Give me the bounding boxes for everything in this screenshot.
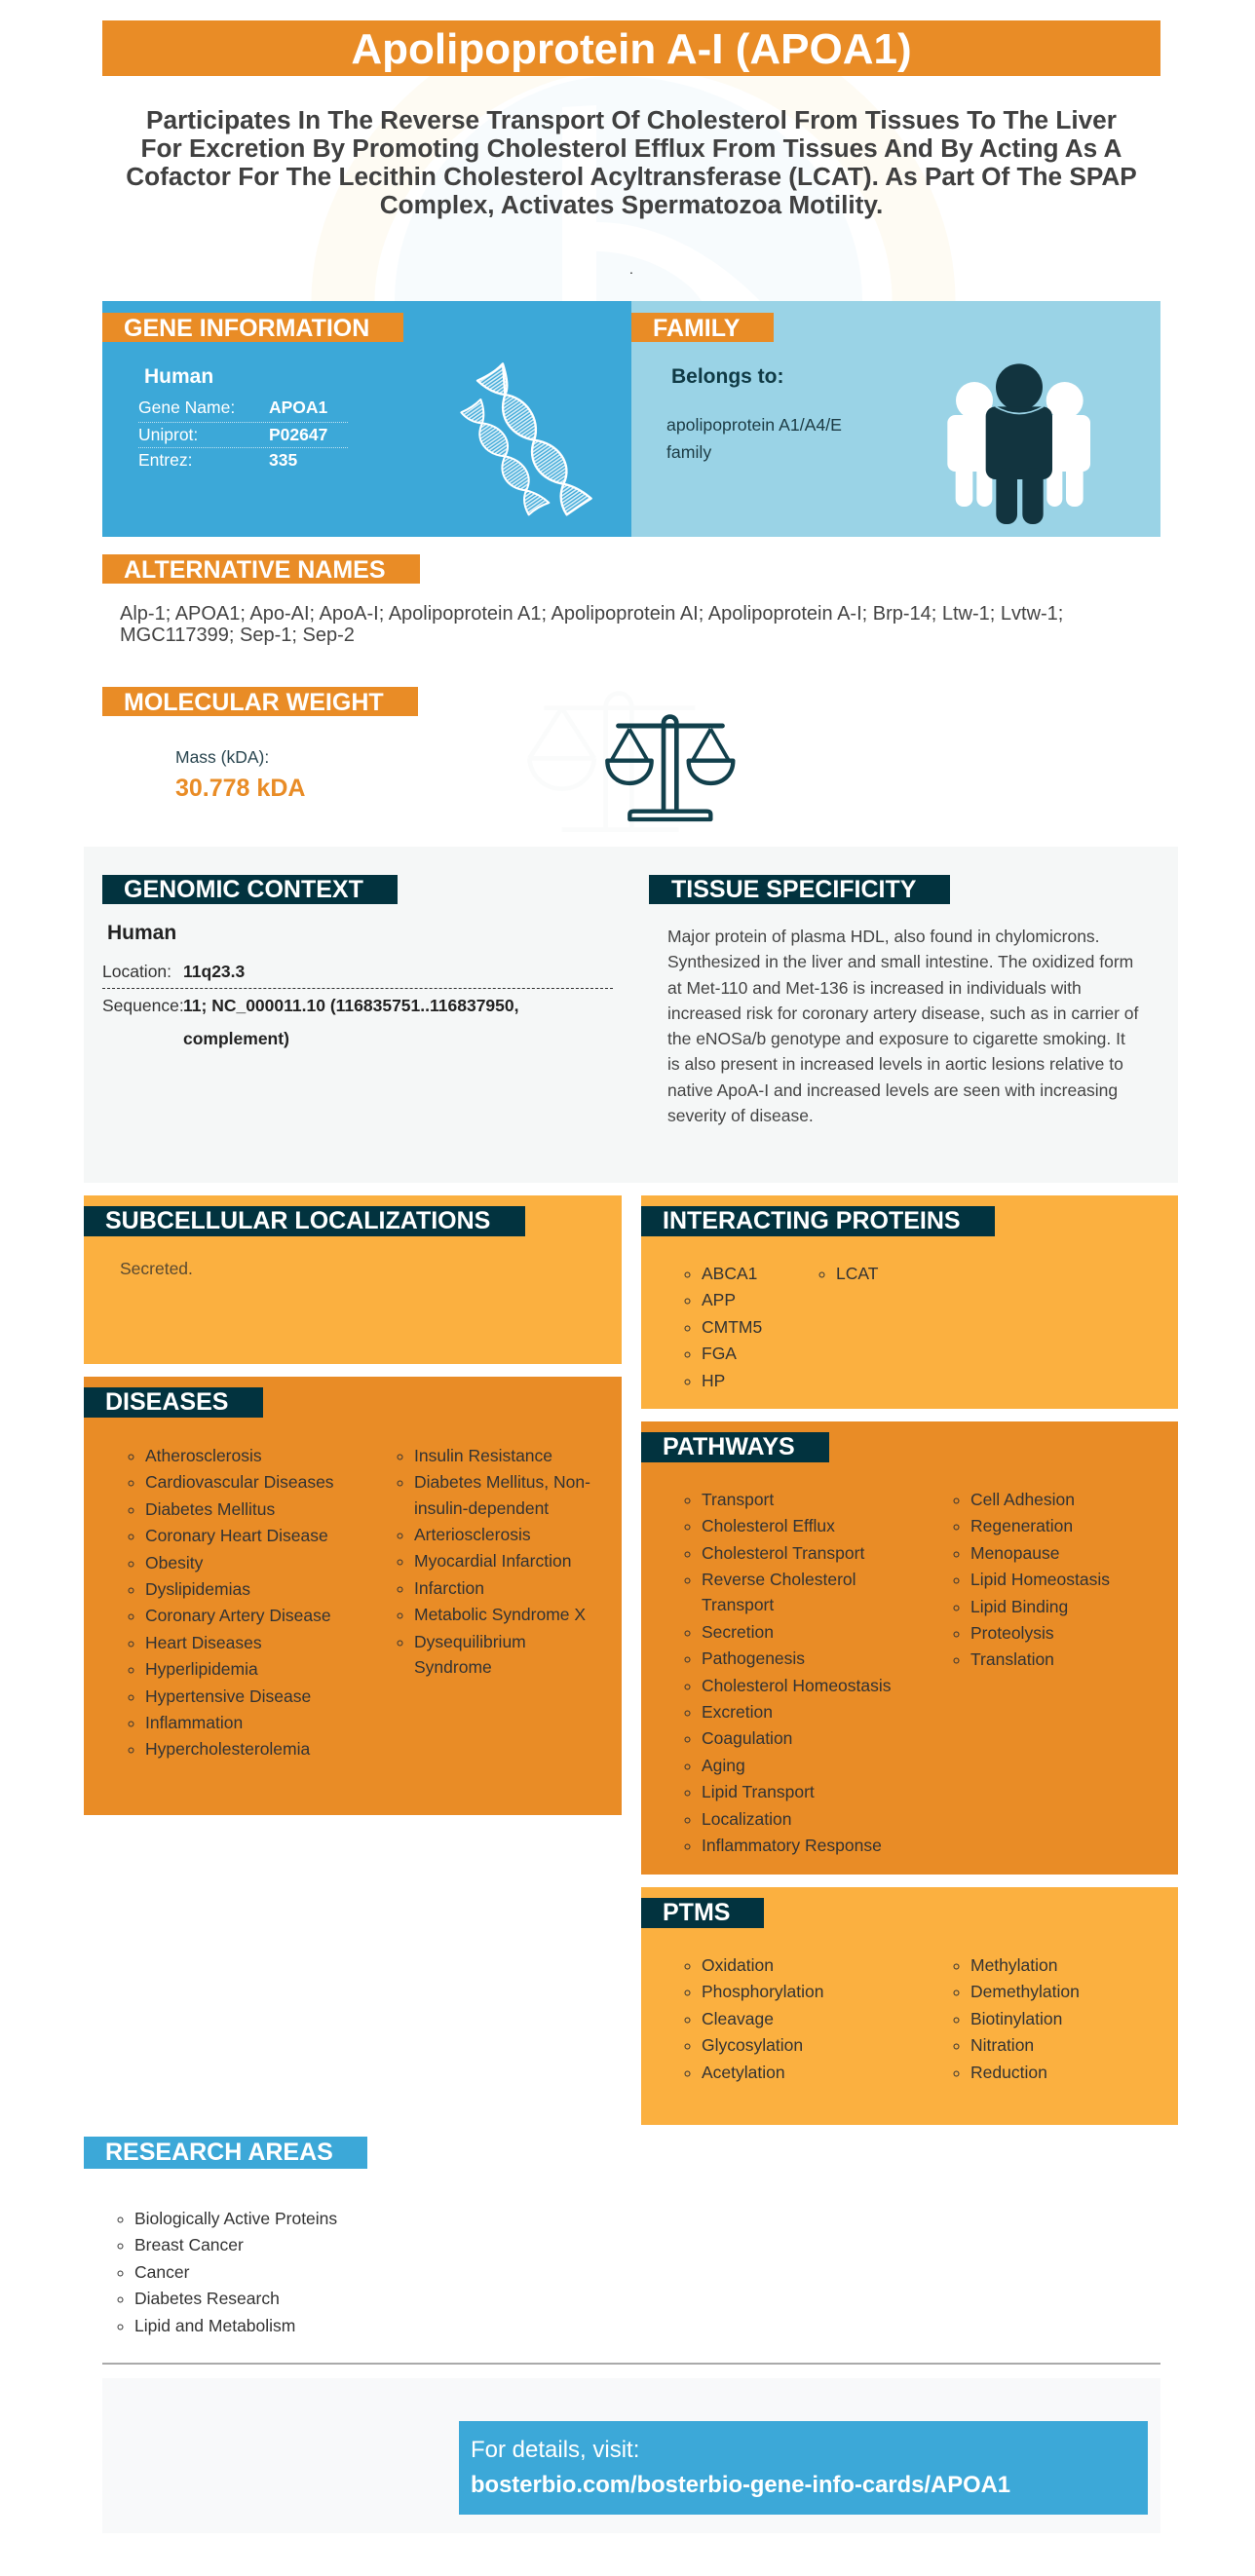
icon: balance scale	[605, 714, 735, 822]
list: diseases column 1: Inflammation	[145, 1713, 243, 1732]
description text: Participates In The Reverse Transport Of Cholesterol From Tissues To The Liver	[146, 105, 1117, 134]
dot mark: .	[629, 261, 633, 277]
list: pathways column 1: Cholesterol Efflux	[702, 1516, 835, 1535]
list: pathways column 2: Translation	[970, 1649, 1054, 1669]
list: pathways column 2	[953, 1490, 1110, 1669]
alternative names text: MGC117399; Sep-1; Sep-2	[120, 625, 355, 646]
list: ptms column 1: Acetylation	[702, 2063, 785, 2082]
list: diseases column 2: Arteriosclerosis	[414, 1525, 531, 1544]
location row: 11q23.3	[183, 962, 245, 981]
list: pathways column 2: Lipid Homeostasis	[970, 1570, 1110, 1589]
list: interacting proteins column 1: CMTM5	[702, 1317, 762, 1337]
list: diseases column 1: Hypercholesterolemia	[145, 1739, 310, 1759]
list: pathways column 1: Excretion	[702, 1702, 773, 1722]
icon: people group	[947, 363, 1090, 524]
panel: pathways	[641, 1421, 1178, 1875]
list: diseases column 1: Coronary Heart Disease	[145, 1526, 328, 1545]
list: diseases column 2: Diabetes Mellitus, Non-	[414, 1472, 590, 1492]
list: pathways column 2: Menopause	[970, 1543, 1059, 1563]
list: pathways column 1: Inflammatory Response	[702, 1836, 882, 1855]
tissue specificity text: Major protein of plasma HDL, also found in chylomicrons.	[667, 927, 1100, 946]
heading: pathways: PATHWAYS	[663, 1433, 795, 1460]
location row: Location:	[102, 962, 171, 981]
panel: diseases	[84, 1377, 622, 1815]
list: ptms column 1: Phosphorylation	[702, 1982, 824, 2001]
icon: faint scale watermark	[507, 672, 760, 838]
list: ptms column 1: Glycosylation	[702, 2035, 803, 2055]
list: pathways column 2: Cell Adhesion	[970, 1490, 1075, 1509]
list: pathways column 1: Aging	[702, 1756, 745, 1775]
list: pathways column 1: Localization	[702, 1809, 791, 1829]
heading: ptms: PTMS	[663, 1899, 730, 1926]
tissue specificity text: at Met-110 and Met-136 is increased in individuals with	[667, 978, 1082, 998]
list: diseases column 2: Insulin Resistance	[414, 1446, 552, 1465]
tissue specificity text: the eNOSa/b genotype and exposure to cigarette smoking. It	[667, 1029, 1125, 1048]
tissue specificity text: increased risk for coronary artery disease, such as in carrier of	[667, 1004, 1138, 1023]
panel: family	[631, 301, 1160, 537]
list: diseases column 1: Heart Diseases	[145, 1633, 262, 1652]
list: research areas: Biologically Active Proteins	[134, 2209, 337, 2228]
list: ptms column 2: Methylation	[970, 1955, 1058, 1975]
list: research areas: Breast Cancer	[134, 2235, 244, 2254]
panel: subcellular localizations	[84, 1195, 622, 1364]
tissue specificity text: severity of disease.	[667, 1106, 814, 1125]
list: interacting proteins column 1	[684, 1264, 762, 1390]
heading: research areas: RESEARCH AREAS	[105, 2139, 333, 2166]
heading: research areas	[84, 2137, 367, 2169]
list: research areas: Diabetes Research	[134, 2289, 280, 2308]
list: diseases column 1: Cardiovascular Diseases	[145, 1472, 334, 1492]
family name	[666, 415, 842, 462]
sequence row	[102, 996, 518, 1048]
list: ptms column 2: Nitration	[970, 2035, 1034, 2055]
list: interacting proteins column 1: FGA	[702, 1344, 737, 1363]
panel: gene information	[102, 301, 631, 537]
list: interacting proteins column 1: HP	[702, 1371, 725, 1390]
uniprot row: Uniprot:	[138, 425, 198, 444]
panel: genomic context and tissue specificity: 11; NC_000011.10 (116835751..116837950,	[183, 996, 518, 1015]
list: pathways column 1: Reverse Cholesterol	[702, 1570, 856, 1589]
list: pathways column 1: Secretion	[702, 1622, 774, 1642]
heading: interacting proteins: INTERACTING PROTEINS	[663, 1207, 961, 1234]
list: pathways column 1: Pathogenesis	[702, 1648, 805, 1668]
divider rule	[102, 2363, 1160, 2365]
uniprot row	[138, 424, 348, 448]
heading: gene information: GENE INFORMATION	[124, 315, 369, 342]
list: diseases column 2: Metabolic Syndrome X	[414, 1605, 586, 1624]
localization text: Secreted.	[120, 1259, 193, 1278]
alternative names text	[120, 603, 1063, 646]
heading: alternative names: ALTERNATIVE NAMES	[124, 556, 386, 584]
family name: family	[666, 442, 711, 462]
mass label: Mass (kDA):	[175, 747, 269, 767]
uniprot row: P02647	[269, 425, 327, 444]
tissue specificity text: Synthesized in the liver and small intestine. The oxidized form	[667, 952, 1133, 971]
heading: pathways	[641, 1432, 829, 1462]
list: ptms column 2: Reduction	[970, 2063, 1047, 2082]
list: diseases column 1: Atherosclerosis	[145, 1446, 262, 1465]
list: diseases column 1: Obesity	[145, 1553, 203, 1572]
list: pathways column 2: Lipid Binding	[970, 1597, 1068, 1616]
list: ptms column 2: Demethylation	[970, 1982, 1080, 2001]
title banner	[102, 20, 1160, 76]
entrez row: Entrez:	[138, 450, 192, 470]
list: diseases column 1: Dyslipidemias	[145, 1579, 250, 1599]
species label: Human	[144, 365, 213, 388]
entrez row: 335	[269, 450, 297, 470]
list: pathways column 1: Transport	[702, 1595, 774, 1614]
list: research areas	[117, 2209, 337, 2335]
list: pathways column 2: Regeneration	[970, 1516, 1073, 1535]
list: interacting proteins column 2: LCAT	[836, 1264, 878, 1283]
description text: Complex, Activates Spermatozoa Motility.	[380, 190, 883, 219]
heading: subcellular localizations: SUBCELLULAR LOCALIZATIONS	[105, 1207, 490, 1234]
list: diseases column 1: Diabetes Mellitus	[145, 1499, 275, 1519]
gene name row: APOA1	[269, 398, 327, 417]
sequence row: Sequence:	[102, 996, 184, 1015]
panel: interacting proteins	[641, 1195, 1178, 1409]
heading: diseases	[84, 1387, 263, 1418]
list: research areas: Cancer	[134, 2262, 189, 2282]
location row	[102, 961, 613, 989]
list: ptms column 1	[684, 1955, 824, 2082]
heading: ptms	[641, 1898, 764, 1928]
belongs to label: Belongs to:	[671, 365, 783, 388]
gene name row	[138, 397, 348, 423]
list: diseases column 1	[129, 1446, 334, 1759]
heading: genomic context: GENOMIC CONTEXT	[124, 876, 363, 903]
list: ptms column 2	[953, 1955, 1080, 2082]
heading: family: FAMILY	[653, 315, 740, 342]
panel: genomic context and tissue specificity: complement)	[183, 1029, 289, 1048]
tissue specificity text: native ApoA-I and increased levels are seen with increasing	[667, 1080, 1118, 1100]
list: pathways column 1: Lipid Transport	[702, 1782, 815, 1801]
entrez row	[138, 450, 297, 470]
title banner: Apolipoprotein A-I (APOA1)	[351, 25, 912, 73]
list: pathways column 2: Proteolysis	[970, 1623, 1054, 1643]
gene name row: Gene Name:	[138, 398, 235, 417]
list: pathways column 1: Coagulation	[702, 1728, 792, 1748]
list: diseases column 1: Coronary Artery Disease	[145, 1606, 331, 1625]
alternative names text: Alp-1; APOA1; Apo-AI; ApoA-I; Apolipoprotein A1; Apolipoprotein AI; Apolipoprotein A-I; Brp-14; Ltw-1; Lvtw-1;	[120, 603, 1063, 625]
heading: tissue specificity: TISSUE SPECIFICITY	[671, 876, 916, 903]
list: pathways column 1	[684, 1490, 892, 1855]
panel: ptms	[641, 1887, 1178, 2125]
list: interacting proteins column 1: ABCA1	[702, 1264, 757, 1283]
heading: molecular weight: MOLECULAR WEIGHT	[124, 689, 384, 716]
family name: apolipoprotein A1/A4/E	[666, 415, 842, 435]
callout: details link	[459, 2421, 1148, 2515]
list: pathways column 1: Cholesterol Transport	[702, 1543, 864, 1563]
list: interacting proteins column 1: APP	[702, 1290, 736, 1309]
panel: genomic context and tissue specificity	[84, 847, 1178, 1183]
callout url: bosterbio.com/bosterbio-gene-info-cards/APOA1	[471, 2472, 1010, 2498]
mass value: 30.778 kDA	[175, 775, 305, 802]
heading: diseases: DISEASES	[105, 1388, 228, 1416]
list: research areas: Lipid and Metabolism	[134, 2316, 295, 2335]
list: diseases column 2: insulin-dependent	[414, 1498, 549, 1518]
list: diseases column 2: Infarction	[414, 1578, 484, 1598]
list: diseases column 1: Hyperlipidemia	[145, 1659, 258, 1679]
panel: footer	[102, 2378, 1160, 2533]
tissue specificity text: is also present in increased levels in aortic lesions relative to	[667, 1054, 1123, 1074]
callout label: For details, visit:	[471, 2437, 639, 2463]
list: pathways column 1: Cholesterol Homeostasis	[702, 1676, 892, 1695]
list: ptms column 1: Oxidation	[702, 1955, 774, 1975]
list: diseases column 1: Hypertensive Disease	[145, 1686, 311, 1706]
description text: For Excretion By Promoting Cholesterol Efflux From Tissues And By Acting As A	[141, 133, 1122, 163]
list: pathways column 1: Transport	[702, 1490, 774, 1509]
list: diseases column 2: Dysequilibrium	[414, 1632, 526, 1651]
description text	[126, 105, 1137, 219]
list: ptms column 1: Cleavage	[702, 2009, 774, 2028]
heading: family	[631, 313, 774, 342]
icon: dna helix	[460, 362, 592, 516]
genomic species label: Human	[107, 922, 176, 944]
background watermark logo	[312, 76, 955, 301]
list: diseases column 2	[398, 1446, 590, 1677]
list: ptms column 2: Biotinylation	[970, 2009, 1062, 2028]
list: diseases column 2: Myocardial Infarction	[414, 1551, 571, 1571]
tissue specificity text	[667, 927, 1138, 1125]
description text: Cofactor For The Lecithin Cholesterol Acyltransferase (LCAT). As Part Of The SPAP	[126, 162, 1137, 191]
list: diseases column 2: Syndrome	[414, 1657, 492, 1677]
